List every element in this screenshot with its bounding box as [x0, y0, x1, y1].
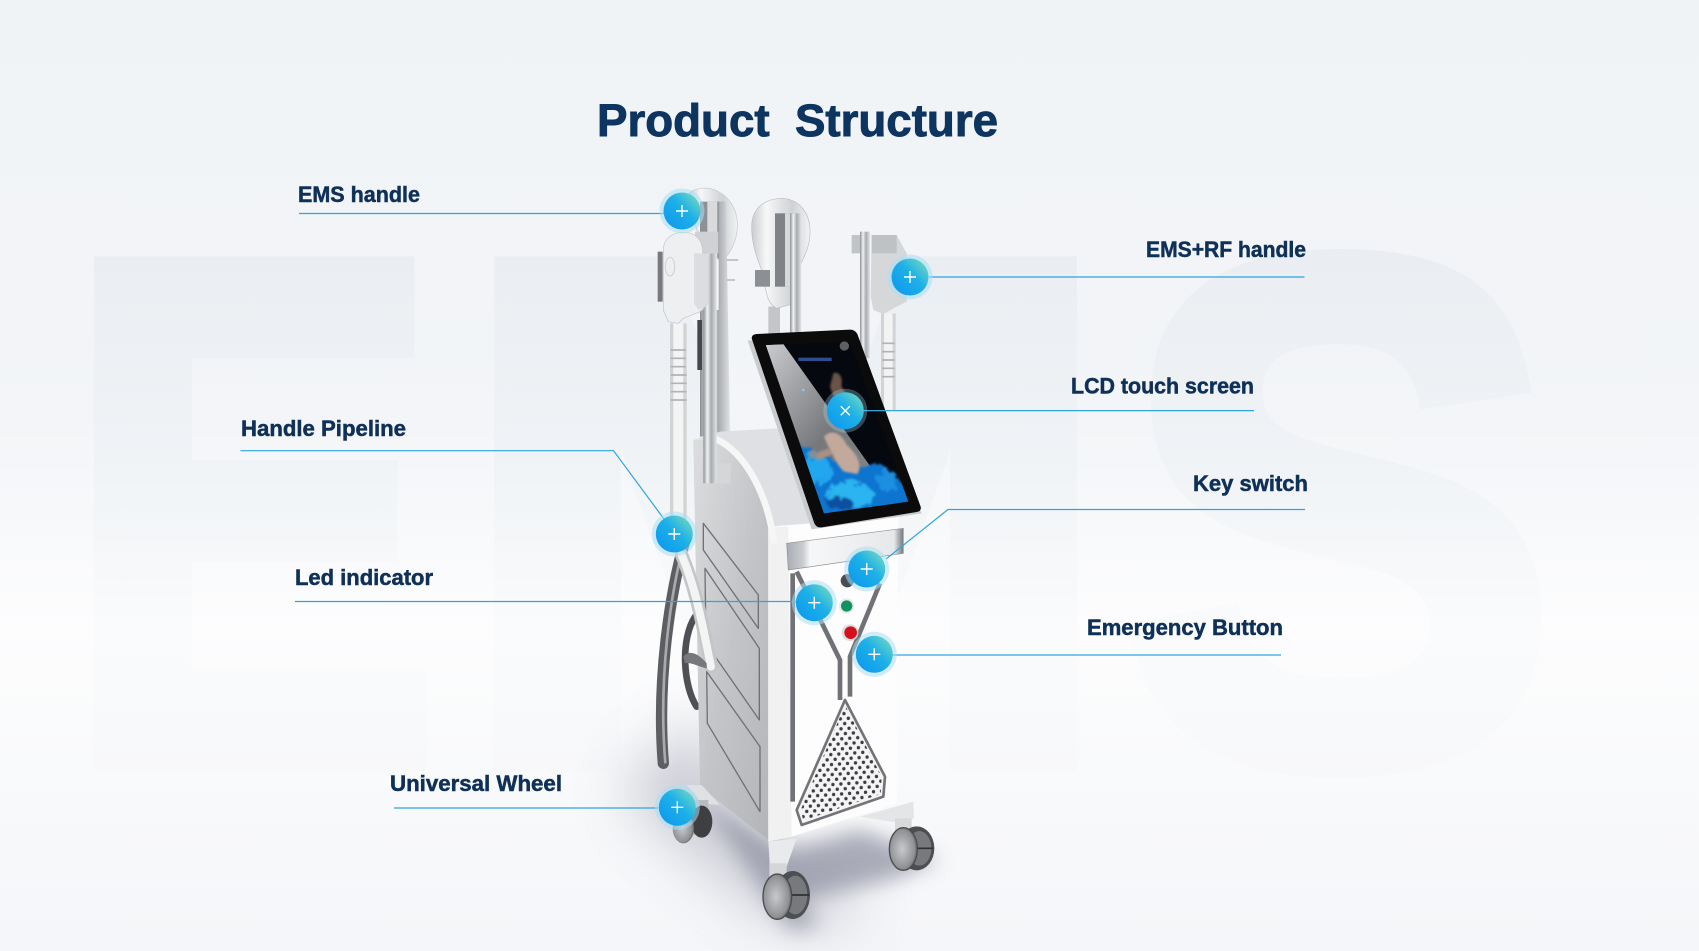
- touch screen: [748, 330, 922, 529]
- casters: [673, 800, 934, 919]
- back leg: [687, 785, 720, 805]
- hotspot: Key switch: [844, 546, 889, 592]
- back caster: [693, 800, 708, 835]
- handle bar: [787, 528, 903, 570]
- red button: [842, 624, 858, 641]
- watermark letters EMS: S: [1121, 112, 1557, 912]
- floor shadow: [620, 720, 940, 930]
- title: Product Structure: [597, 95, 998, 146]
- machine: [658, 188, 934, 919]
- hotspot: Handle Pipeline: [652, 512, 697, 556]
- middle handle: [752, 198, 810, 335]
- label: EMS+RF handle: EMS+RF handle: [1146, 237, 1306, 262]
- Y groove: [793, 572, 880, 802]
- watermark letters EMS: [65, 112, 1557, 912]
- hotspot: Led indicator: [792, 580, 837, 625]
- front leg and caster: [768, 838, 797, 868]
- left handle hose: [671, 323, 687, 523]
- right handle and pole: [852, 232, 907, 410]
- label: Key switch: Key switch: [1193, 471, 1308, 496]
- label: Led indicator: Led indicator: [295, 565, 433, 590]
- green button: [839, 598, 854, 614]
- label: Key switch: [886, 471, 1308, 559]
- body top surface: [693, 428, 817, 540]
- label: Handle Pipeline: [240, 416, 664, 519]
- cable loops: [662, 540, 697, 763]
- body side face: [693, 440, 768, 840]
- hose and holder: [682, 555, 712, 668]
- right leg and caster: [860, 802, 914, 823]
- hotspot: Emergency Button: [852, 632, 897, 677]
- side panels: [703, 523, 760, 812]
- hotspot: EMS+RF handle: [888, 254, 932, 300]
- label: EMS handle: EMS handle: [298, 182, 420, 207]
- cabinet body: [687, 428, 903, 842]
- label: Handle Pipeline: Handle Pipeline: [241, 416, 406, 441]
- label: Emergency Button: Emergency Button: [1087, 615, 1283, 640]
- label: LCD touch screen: LCD touch screen: [1071, 374, 1254, 398]
- key switch: [841, 574, 854, 587]
- hotspot: LCD touch screen: [823, 389, 867, 433]
- body front face: [768, 517, 898, 842]
- rear handle and poles: [688, 188, 738, 437]
- front handle and pole: [658, 232, 731, 483]
- label: Universal Wheel: Universal Wheel: [390, 771, 562, 796]
- hotspot: Universal Wheel: [655, 785, 700, 830]
- watermark letters EMS: E: [65, 112, 439, 912]
- hotspot: EMS handle: [660, 188, 704, 234]
- watermark letters EMS: M: [453, 112, 1118, 912]
- vent grille: [797, 700, 885, 825]
